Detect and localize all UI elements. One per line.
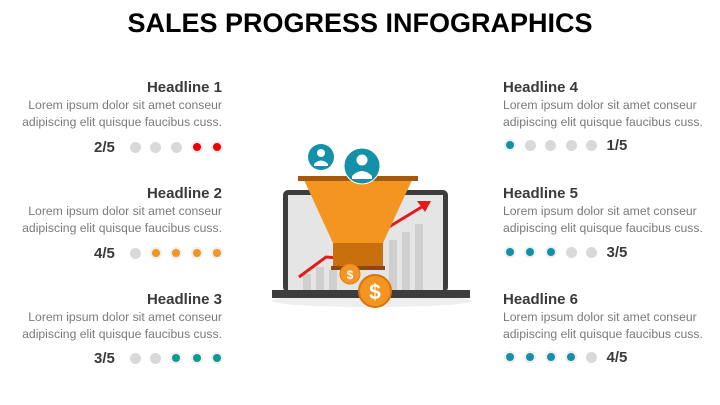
block: headline 2: Lorem ipsum dolor sit amet conseur bbox=[28, 204, 222, 218]
block: headline 6 bbox=[503, 291, 703, 341]
rating 6 bbox=[504, 348, 627, 366]
block: headline 5: Headline 5 bbox=[503, 185, 578, 202]
rating 3 bbox=[94, 350, 223, 366]
block: headline 1: Headline 1 bbox=[147, 79, 222, 96]
block: headline 1: Lorem ipsum dolor sit amet conseur bbox=[28, 98, 222, 112]
funnel bbox=[298, 176, 418, 270]
rating 5 bbox=[504, 244, 627, 260]
rating 2 bbox=[94, 244, 223, 262]
block: headline 4: adipiscing elit quisque faucibus cuss. bbox=[503, 115, 703, 129]
block: headline 1 bbox=[22, 79, 222, 129]
arrow bbox=[299, 201, 431, 277]
rating 4 bbox=[504, 136, 627, 154]
block: headline 2: Headline 2 bbox=[147, 185, 222, 202]
icon: coins: $ bbox=[369, 281, 381, 304]
rating 3: 3/5 bbox=[94, 350, 115, 366]
block: headline 3 bbox=[22, 291, 222, 341]
laptop bbox=[272, 190, 470, 298]
rating 1 bbox=[94, 138, 223, 156]
rating 5: 3/5 bbox=[606, 244, 627, 260]
title: SALES PROGRESS INFOGRAPHICS bbox=[127, 8, 593, 38]
block: headline 6: Headline 6 bbox=[503, 291, 578, 308]
shadow bbox=[272, 295, 472, 307]
icon: coins: $ bbox=[347, 268, 354, 282]
icon: users bbox=[308, 144, 380, 184]
block: headline 1: adipiscing elit quisque faucibus cuss. bbox=[22, 115, 222, 129]
block: headline 3: Lorem ipsum dolor sit amet conseur bbox=[28, 310, 222, 324]
rating 4: 1/5 bbox=[606, 136, 627, 154]
rating 2: 4/5 bbox=[94, 244, 115, 262]
block: headline 4: Headline 4 bbox=[503, 79, 578, 96]
block: headline 2: adipiscing elit quisque faucibus cuss. bbox=[22, 221, 222, 235]
block: headline 5 bbox=[503, 185, 703, 235]
block: headline 3: adipiscing elit quisque faucibus cuss. bbox=[22, 327, 222, 341]
block: headline 6: adipiscing elit quisque faucibus cuss. bbox=[503, 327, 703, 341]
block: headline 5: adipiscing elit quisque faucibus cuss. bbox=[503, 221, 703, 235]
block: headline 4: Lorem ipsum dolor sit amet conseur bbox=[503, 98, 697, 112]
rating 1: 2/5 bbox=[94, 138, 115, 156]
icon: coins bbox=[340, 264, 391, 307]
block: headline 6: Lorem ipsum dolor sit amet conseur bbox=[503, 310, 697, 324]
block: headline 4 bbox=[503, 79, 703, 129]
block: headline 5: Lorem ipsum dolor sit amet conseur bbox=[503, 204, 697, 218]
block: headline 2 bbox=[22, 185, 222, 235]
block: headline 3: Headline 3 bbox=[147, 291, 222, 308]
rating 6: 4/5 bbox=[606, 348, 627, 366]
